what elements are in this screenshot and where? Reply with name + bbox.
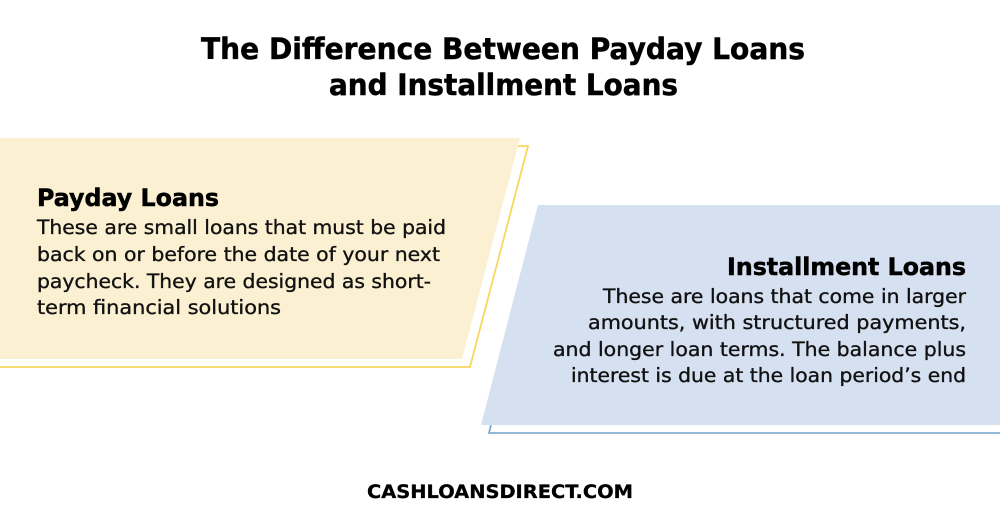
heading: payday loans: Payday Loans — [37, 184, 219, 212]
footer website: CASHLOANSDIRECT.COM — [367, 482, 633, 503]
yellow panel background — [0, 138, 520, 359]
text block: payday description — [36, 216, 446, 319]
text block: payday description: paycheck. They are designed as short- — [37, 270, 431, 293]
title: and Installment Loans — [329, 68, 678, 102]
text block: installment description — [553, 285, 967, 387]
title: The Difference Between Payday Loans — [201, 32, 805, 66]
heading: installment loans: Installment Loans — [727, 253, 966, 281]
text block: payday description: These are small loans that must be paid — [36, 216, 446, 239]
text block: installment description: These are loans that come in larger — [602, 285, 967, 308]
text block: payday description: back on or before the date of your next — [37, 243, 440, 266]
blue panel outline — [489, 425, 1000, 433]
blue panel background — [481, 205, 1000, 425]
text block: installment description: and longer loan terms. The balance plus — [553, 338, 966, 361]
panel: payday loans — [0, 138, 528, 367]
title — [201, 32, 805, 102]
panel: installment loans — [481, 205, 1000, 433]
text block: installment description: amounts, with structured payments, — [588, 311, 966, 334]
yellow panel outline — [0, 146, 528, 367]
text block: payday description: term financial solutions — [37, 296, 281, 319]
text block: installment description: interest is due at the loan period’s end — [571, 364, 966, 387]
